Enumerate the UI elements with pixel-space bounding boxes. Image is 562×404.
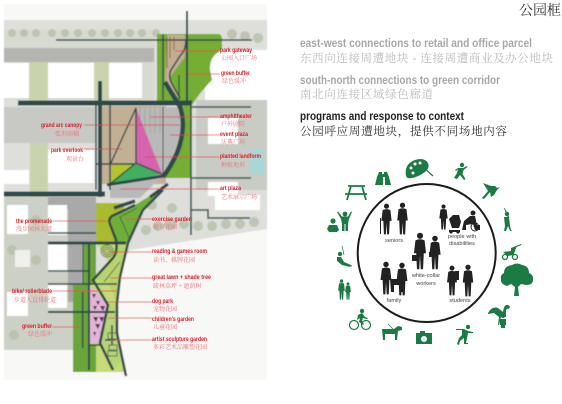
icon: stroller [502,244,522,260]
map labels: 庆典广场 [221,138,245,146]
map labels: 种植地形 [221,161,245,169]
top green and tan [157,34,222,105]
icon: couple walking [338,279,351,300]
map labels: 弧形雨棚 [55,130,79,138]
map labels: green buffer [221,71,251,77]
icon: picnic table [345,186,367,200]
sculpture and rings [101,245,118,356]
icon: dog [382,324,402,340]
text block: south-north connections [300,73,500,101]
icon ring [327,159,533,345]
map labels: dog park [152,299,174,305]
white-collar workers group: white-collar [411,273,440,279]
people with disabilities group: disabilities [449,241,475,247]
map labels: great lawn + shade tree [152,275,212,281]
map labels: grand arc canopy [41,123,83,129]
buildings [4,50,267,316]
map labels: bike/ rollerblade [12,289,53,295]
red leader lines [52,51,220,340]
map labels: 艺术展示广场 [221,193,257,201]
map labels: 读书、棋牌花园 [153,256,195,264]
map labels: 绿色缓冲 [222,77,246,85]
lower greens [96,203,125,243]
map labels: 绿色缓冲 [28,330,52,338]
seniors group: seniors [385,238,403,244]
icon: skater [456,325,473,345]
map labels: park gateway [220,48,253,54]
people with disabilities group [439,205,480,247]
map labels: 疏林草坪 + 遮荫树 [153,282,201,290]
map labels: art plaza [220,186,242,192]
map labels: planted landform [220,154,261,160]
map labels: 儿童花园 [153,323,177,331]
icon: flamingo and child [488,305,510,328]
users circle [358,184,496,322]
text block: east-west connections [300,36,554,65]
tree rows [7,29,263,340]
map labels: reading & games room [152,249,207,255]
text block: programs and response [300,109,508,138]
map labels: event plaza [220,132,249,138]
paths network [4,11,252,376]
white-collar workers group: workers [415,281,436,287]
icon: tree [501,264,533,296]
pink dots [92,294,105,336]
title: 公园框 [519,2,561,19]
text block: programs and response: 公园呼应周遭地块，提供不同场地内容 [300,124,508,138]
icon: swing [337,246,352,267]
map labels: 步道入直排轮道 [14,296,56,304]
map labels: children's garden [152,317,194,323]
map labels: 观景台 [66,155,84,163]
map labels: artist sculpture garden [152,337,207,343]
family group: family [387,298,402,304]
map labels: park overlook [51,148,84,154]
map labels: green buffer [22,324,53,330]
map labels: 宠物花园 [153,305,177,313]
white-collar workers group [411,233,441,287]
icon: binoculars [375,172,391,185]
text block: east-west connections: 东西向连接周遭地块 - 连接周遭商业及办公地块 [300,51,554,65]
icon: palette [406,159,433,178]
map labels: 户外剧院 [221,120,245,128]
map labels: 漫步园林大道 [16,225,52,233]
panel: park site plan [4,4,267,380]
map labels: 公园入口广场 [221,54,257,62]
map labels: the promenade [16,219,53,225]
icon: golfer [504,208,512,231]
text block: programs and response: programs and response to context [300,109,464,123]
pink triangle [136,108,162,174]
icon: bird [482,183,500,199]
map labels: 健身花园 [153,223,177,231]
people with disabilities group: people with [448,234,476,240]
icon: runner [454,163,468,180]
map labels: amphitheater [220,114,253,120]
plaza [100,106,166,184]
map labels: 多彩艺术品雕塑花园 [153,343,207,351]
text block: south-north connections: south-north connections to green corridor [300,73,500,87]
map labels [12,48,261,351]
icon: cyclist [350,309,370,330]
students group: students [449,298,471,304]
text block: south-north connections: 南北向连接区域绿色廊道 [300,87,434,101]
icon: camera [416,331,432,344]
icon: children playing [327,212,352,232]
map labels: exercise garden [152,217,192,223]
